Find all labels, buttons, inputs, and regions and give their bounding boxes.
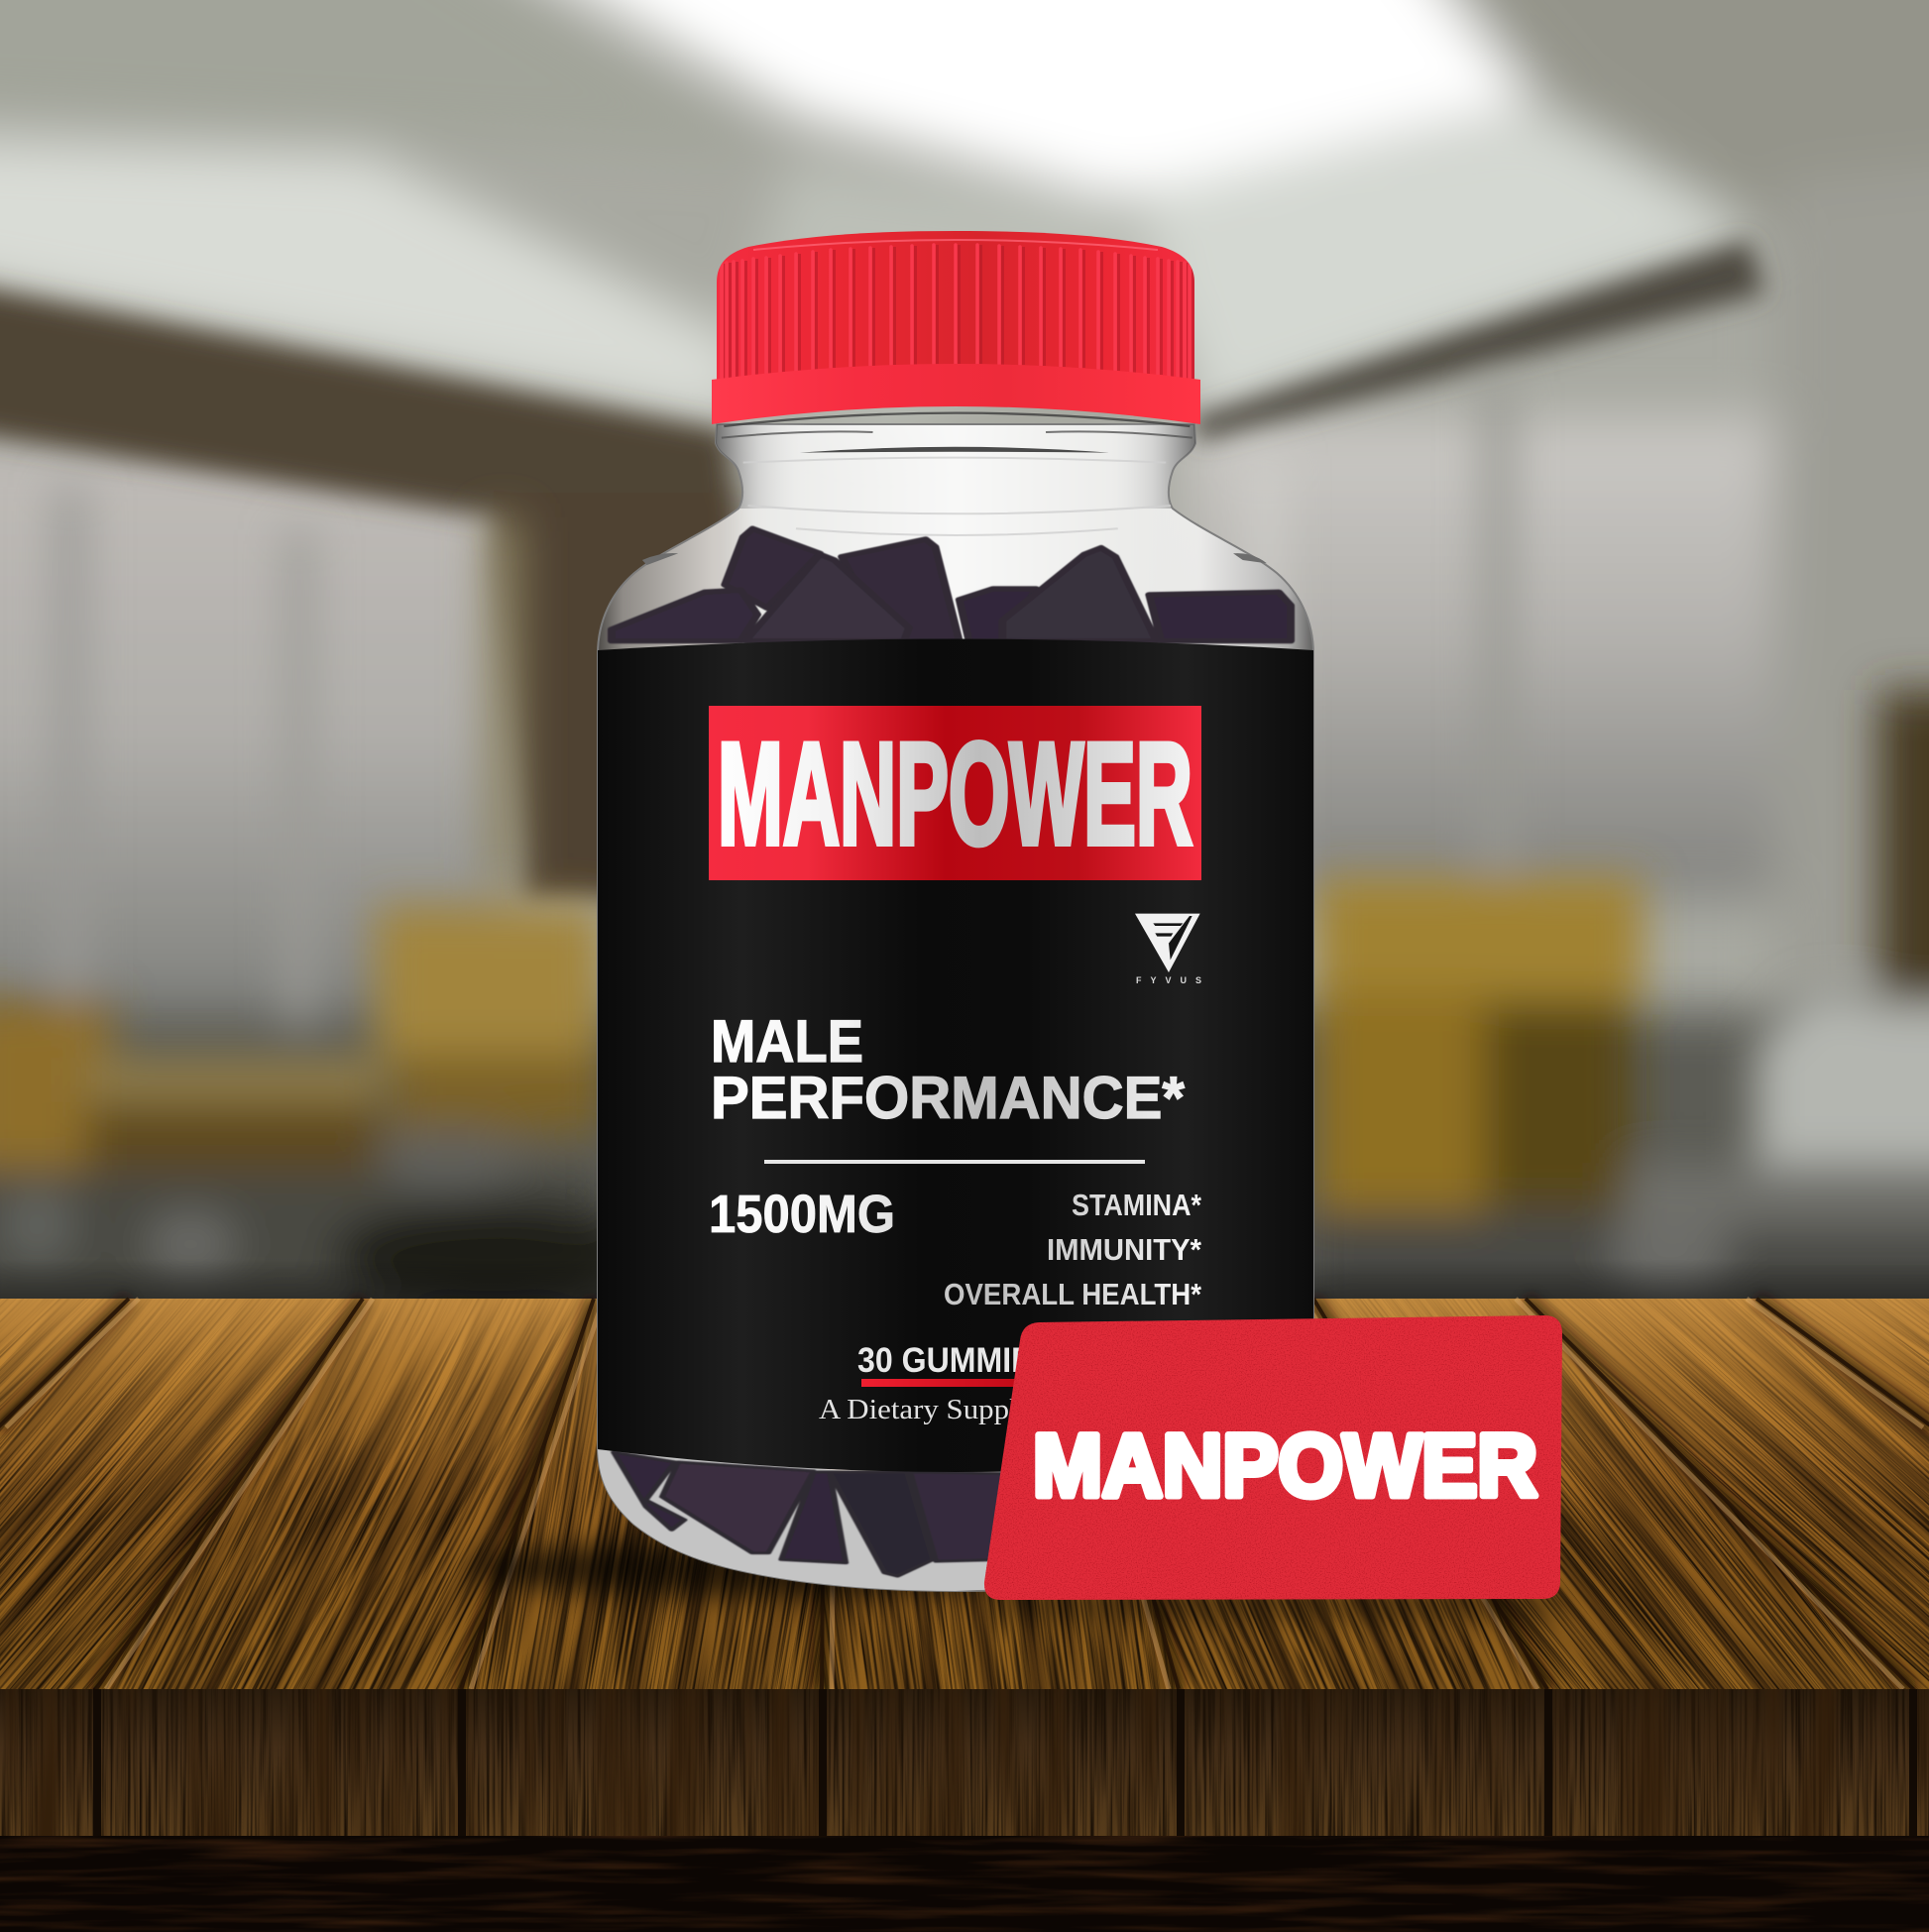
gummies below label [614,1452,1013,1576]
red ribbed cap [712,231,1200,424]
benefits list: IMMUNITY* [1047,1232,1202,1267]
bottle and card cast shadows [466,1538,1561,1616]
red felt brand card [976,1308,1571,1606]
table top planks [0,1299,1929,1689]
benefits list [944,1188,1202,1311]
blurred office background [0,0,1929,1330]
black label [598,638,1313,1472]
table front edge [0,1689,1929,1838]
neck shading [716,424,1195,509]
table underside shadow [0,1836,1929,1932]
red underline [861,1379,1050,1387]
icon: Fyvus logo: FYVUS [1136,975,1201,985]
icon: Fyvus logo [1135,914,1201,985]
dosage: 1500MG [709,1185,895,1244]
benefits list: OVERALL HEALTH* [944,1277,1202,1311]
product title: PERFORMANCE* [711,1065,1186,1131]
gummies above label [612,528,1291,641]
bottom glass base tint [598,1449,1021,1591]
clear glass jar [598,424,1313,1591]
dietary supplement note: A Dietary Supplement [819,1395,1092,1425]
product title: MALE [711,1008,863,1075]
brand name: MANPOWER [718,713,1192,874]
divider line [764,1160,1145,1164]
neck ridges and reflections [642,413,1267,565]
card brand name: MANPOWER [1033,1416,1537,1515]
supplement bottle [598,231,1313,1591]
red brand banner [709,706,1201,880]
gummy count: 30 GUMMIES [857,1341,1054,1380]
product title [711,1008,1186,1131]
wooden table [0,1299,1929,1932]
benefits list: STAMINA* [1072,1188,1202,1222]
